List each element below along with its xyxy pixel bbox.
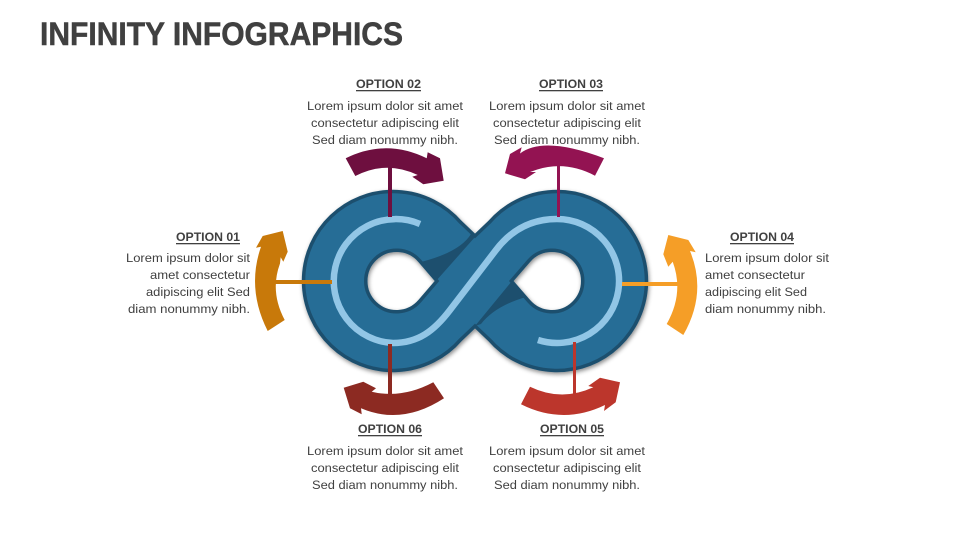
text block: option 04: Lorem ipsum dolor sit — [705, 251, 830, 265]
text block: option 06 — [307, 422, 464, 492]
heading: option 04: OPTION 04 — [730, 230, 794, 244]
heading: option 03: OPTION 03 — [539, 77, 603, 91]
text block: option 04: adipiscing elit Sed — [705, 285, 807, 299]
heading: option 02: OPTION 02 — [356, 77, 421, 91]
arrow: option 05 — [521, 378, 620, 415]
text block: option 02 — [307, 77, 464, 147]
text block: option 06: consectetur adipiscing elit — [311, 461, 460, 475]
text block: option 01: diam nonummy nibh. — [128, 302, 250, 316]
text block: option 01: adipiscing elit Sed — [146, 285, 250, 299]
arrow: option 02 — [346, 148, 444, 184]
text block: option 05 — [489, 422, 646, 492]
text block: option 01: amet consectetur — [150, 268, 250, 282]
text block: option 01 — [126, 230, 251, 316]
text block: option 04: diam nonummy nibh. — [705, 302, 826, 316]
arrow: option 06 — [344, 382, 444, 415]
text block: option 06: Sed diam nonummy nibh. — [312, 478, 458, 492]
connector: option 04 — [622, 282, 678, 286]
arrow: option 03 — [505, 146, 604, 179]
text block: option 05: consectetur adipiscing elit — [493, 461, 642, 475]
infinity symbol — [304, 191, 646, 370]
infinity body — [304, 191, 646, 370]
text block: option 02: Sed diam nonummy nibh. — [312, 133, 458, 147]
connector: option 05 — [573, 342, 576, 396]
heading: option 06: OPTION 06 — [358, 422, 422, 436]
text block: option 03: Sed diam nonummy nibh. — [494, 133, 640, 147]
text block: option 02: Lorem ipsum dolor sit amet — [307, 99, 464, 113]
text block: option 04: amet consectetur — [705, 268, 805, 282]
arrow: option 04 — [663, 235, 697, 335]
text block: option 06: Lorem ipsum dolor sit amet — [307, 444, 464, 458]
text block: option 05: Sed diam nonummy nibh. — [494, 478, 640, 492]
connector: option 06 — [388, 344, 392, 396]
connector: option 01 — [275, 280, 332, 284]
text block: option 02: consectetur adipiscing elit — [311, 116, 460, 130]
text block: option 03: Lorem ipsum dolor sit amet — [489, 99, 646, 113]
crossing shadow: left — [421, 234, 475, 281]
text block: option 01: Lorem ipsum dolor sit — [126, 251, 251, 265]
heading: option 01: OPTION 01 — [176, 230, 240, 244]
title: INFINITY INFOGRAPHICS — [40, 16, 403, 52]
heading: option 05: OPTION 05 — [540, 422, 604, 436]
text block: option 04 — [705, 230, 830, 316]
text block: option 03 — [489, 77, 646, 147]
light ribbon line — [334, 219, 619, 343]
connector: option 02 — [388, 166, 392, 217]
connector: option 03 — [557, 165, 560, 217]
text block: option 05: Lorem ipsum dolor sit amet — [489, 444, 646, 458]
text block: option 03: consectetur adipiscing elit — [493, 116, 642, 130]
crossing shadow: right — [475, 281, 526, 326]
arrow: option 01 — [255, 231, 288, 331]
